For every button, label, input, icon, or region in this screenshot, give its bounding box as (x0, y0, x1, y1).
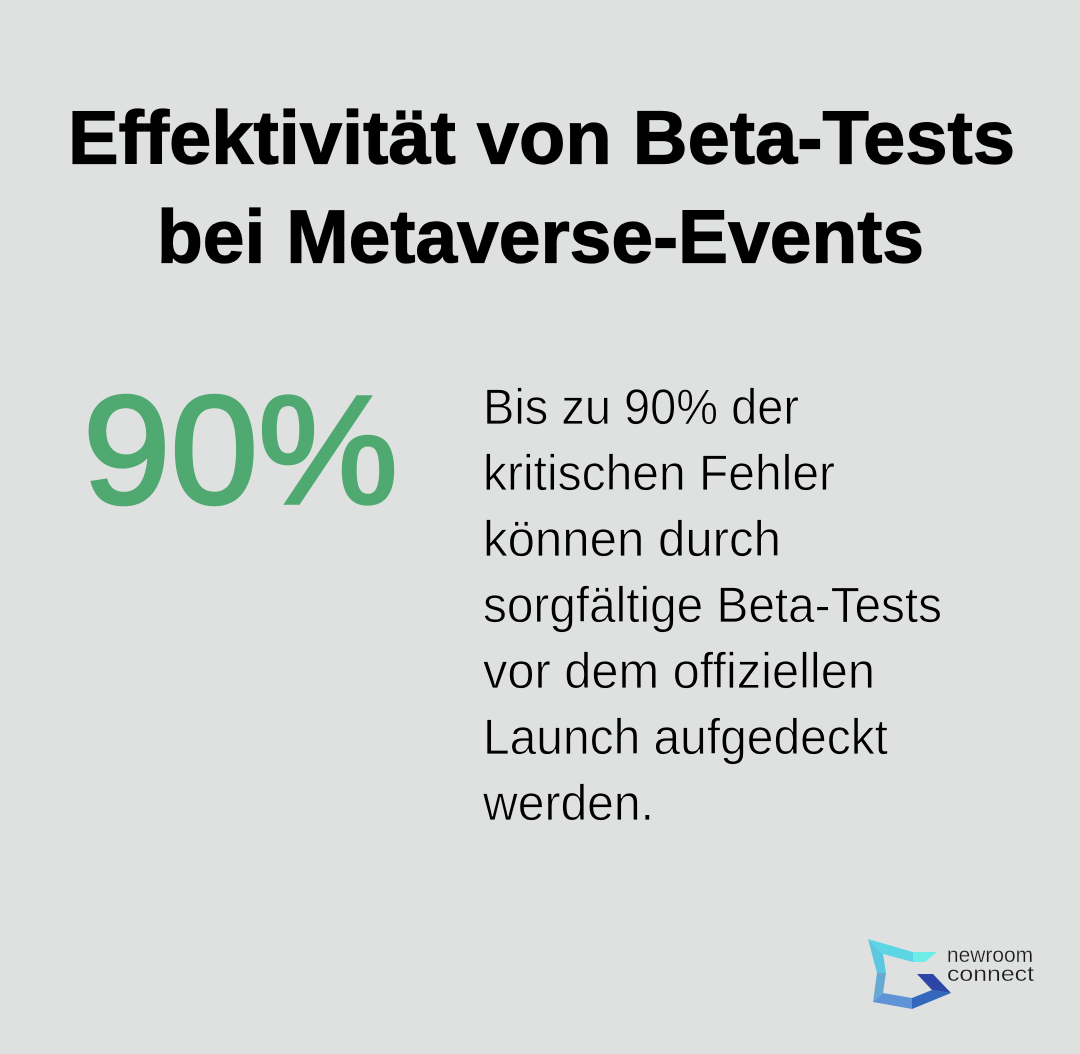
body text: Launch aufgedeckt (483, 709, 888, 765)
logo wordmark: newroom (947, 944, 1033, 967)
body text: kritischen Fehler (483, 445, 835, 501)
icon: logo mark (868, 939, 951, 1009)
body text: Bis zu 90% der (483, 379, 799, 435)
logo: newroom connect (868, 939, 1034, 1009)
body text: vor dem offiziellen (483, 643, 875, 699)
big statistic: 90%: 90% (83, 364, 398, 536)
body text (482, 379, 942, 831)
title: bei Metaverse-Events (157, 194, 924, 278)
logo wordmark: connect (947, 963, 1034, 986)
title: Effektivität von Beta-Tests (68, 96, 1015, 180)
logo wordmark (947, 944, 1034, 986)
body text: sorgfältige Beta-Tests (483, 577, 942, 633)
title (68, 96, 1015, 278)
body text: werden. (482, 775, 654, 831)
body text: können durch (483, 511, 781, 567)
